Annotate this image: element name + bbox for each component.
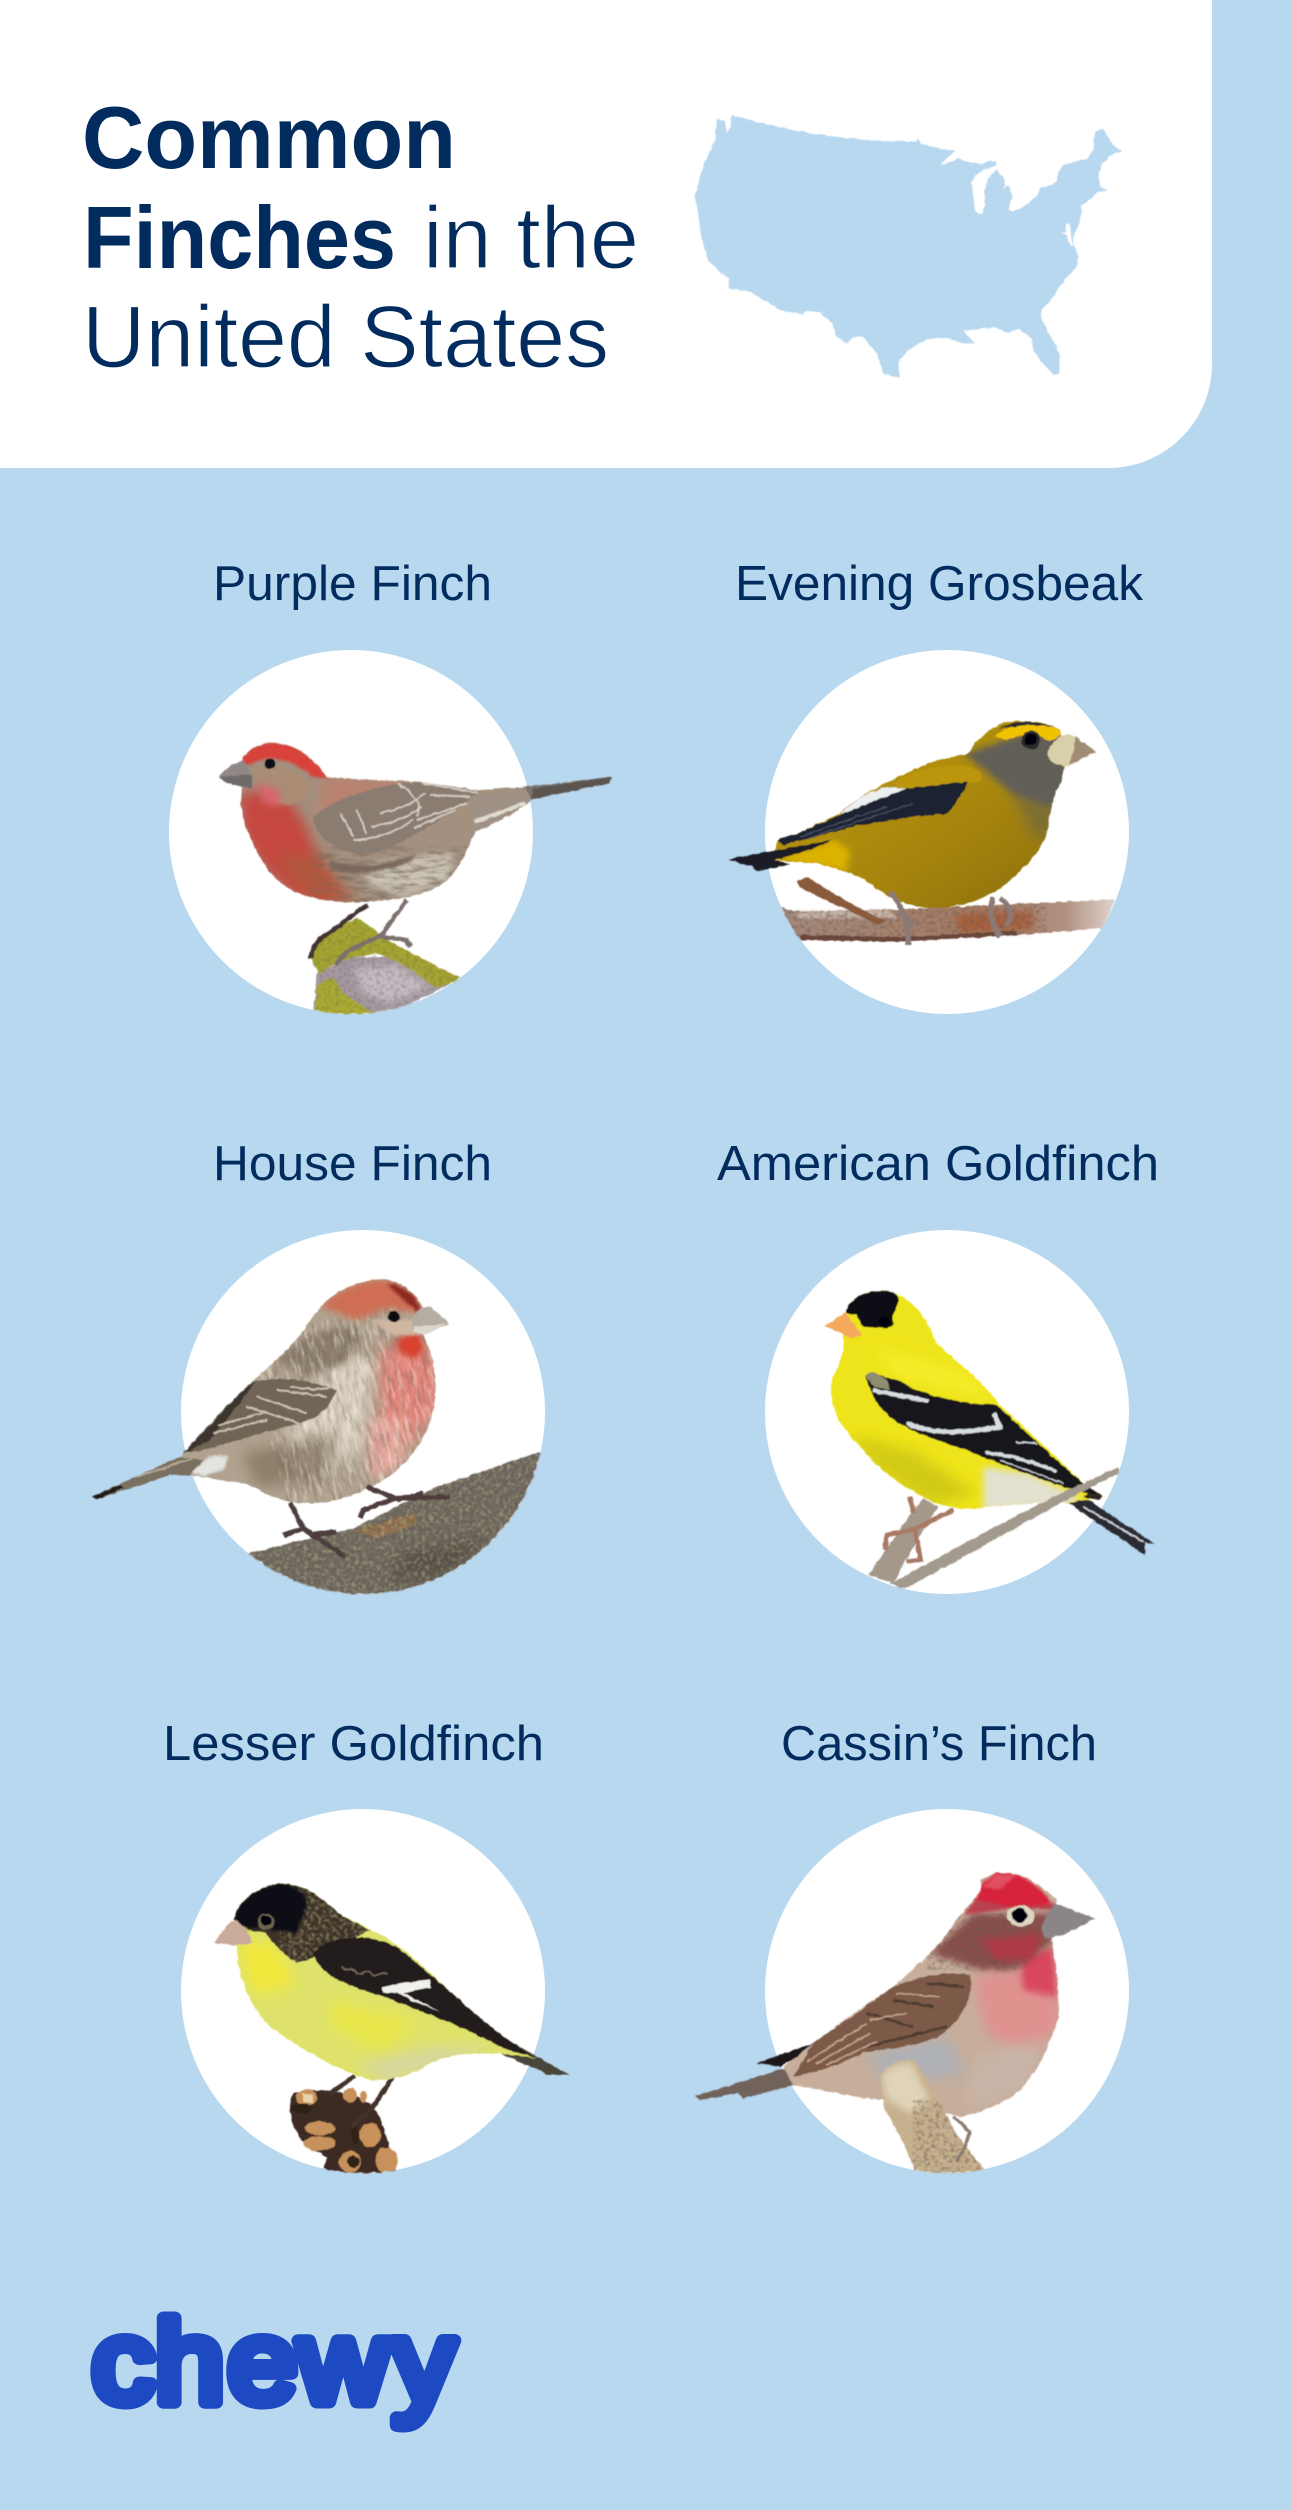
header panel [0,0,1212,468]
white circle: Purple Finch [169,650,533,1014]
heading: Evening Grosbeak: Evening Grosbeak [735,557,1143,611]
illustration: House Finch on bark [87,1277,543,1597]
tail [1067,1497,1155,1555]
illustration: Purple Finch on mossy branch [218,737,617,1017]
beak [1047,735,1096,767]
tail [756,2043,815,2067]
illustration: American Goldfinch on twigs [825,1287,1155,1589]
illustration: Evening Grosbeak on branch [728,717,1115,945]
body [774,720,1066,909]
beak [412,1307,449,1335]
heading: Purple Finch: Purple Finch [213,557,492,611]
beak [1042,1903,1095,1938]
panel: Evening Grosbeak [728,557,1143,1014]
white circle: Cassin's Finch [765,1809,1129,2173]
beak [214,1919,252,1945]
eye [1021,731,1040,749]
beak [825,1312,862,1338]
tail [500,2045,570,2075]
legs [283,1503,345,1557]
title: United States [82,287,609,386]
title: Common [82,88,456,187]
panel: American Goldfinch [717,1137,1159,1594]
wing [840,787,910,815]
title: in the [423,188,639,287]
feet [890,892,1011,945]
logo: chewy: chewy [92,2298,455,2427]
tail [728,839,833,872]
title [82,88,639,386]
legs [885,1497,953,1562]
eye [265,759,275,769]
heading: Cassin's Finch: Cassin’s Finch [781,1717,1097,1771]
wing bars [382,1979,440,2012]
map: contiguous United States [695,115,1122,378]
heading: American Goldfinch: American Goldfinch [717,1137,1159,1191]
white circle: House Finch [181,1230,545,1594]
heading: Lesser Goldfinch: Lesser Goldfinch [163,1717,544,1771]
tail [532,777,612,799]
eye [1007,1905,1035,1927]
eye [388,1311,400,1322]
illustration: Cassin's Finch on stump [695,1870,1095,2175]
eye [258,1914,274,1930]
white circle: Evening Grosbeak [765,650,1129,1014]
panel: House Finch [87,1137,545,1597]
title: Finches [83,188,396,287]
illustration: Lesser Goldfinch on seed head [214,1880,570,2175]
panel: Cassin's Finch [695,1717,1129,2175]
panel: Lesser Goldfinch [163,1717,570,2175]
panel: Purple Finch [169,557,617,1017]
white circle: American Goldfinch [765,1230,1129,1594]
white circle: Lesser Goldfinch [181,1809,545,2173]
heading: House Finch: House Finch [213,1137,492,1191]
beak [218,761,253,788]
